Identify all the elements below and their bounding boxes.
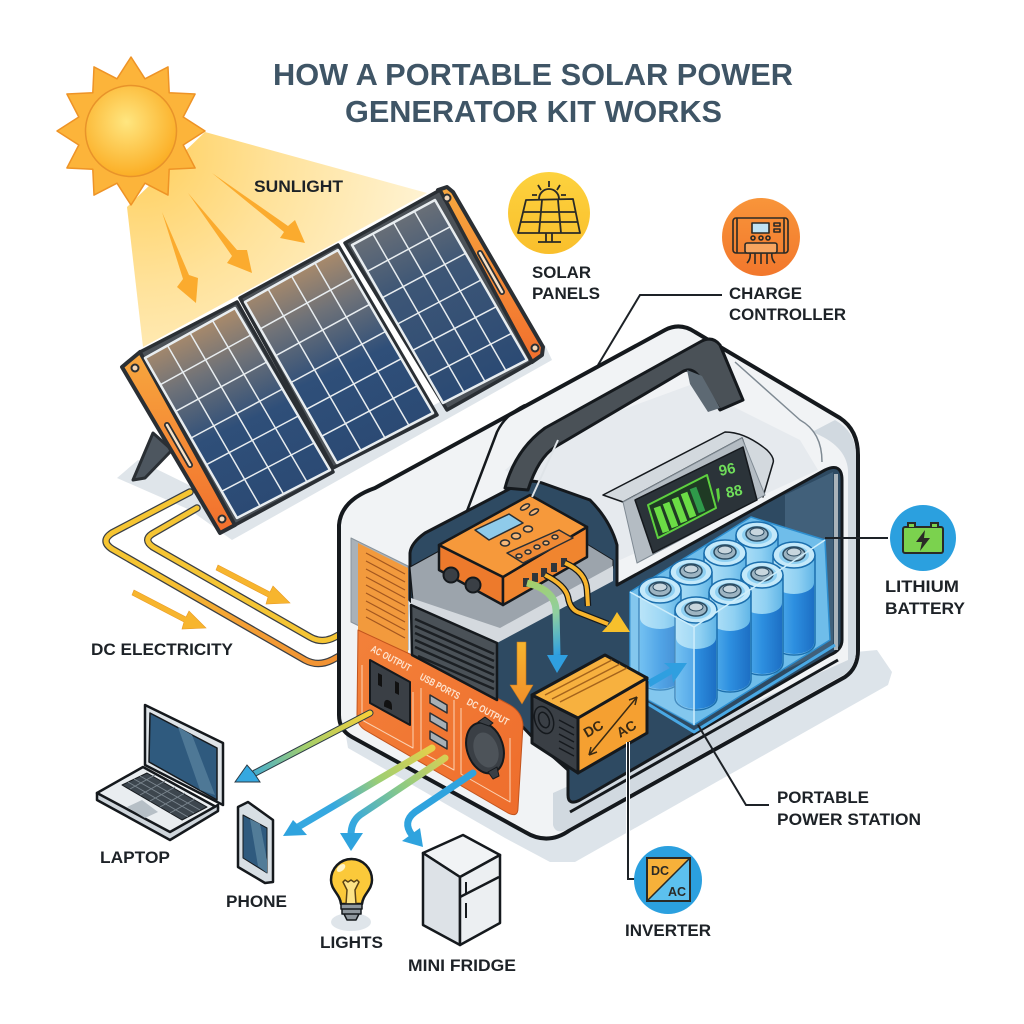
label: sunlight: SUNLIGHT: [254, 177, 344, 196]
panel 3 cells: [352, 200, 527, 403]
label: portable power station: PORTABLE: [777, 788, 869, 807]
output arrow: to fridge: [402, 773, 473, 847]
display digits: [717, 460, 744, 502]
icon: inverter badge: AC: [668, 885, 686, 899]
usb ports: [430, 695, 447, 749]
sunlight beam: [127, 132, 427, 347]
icon: sun: [57, 57, 205, 205]
inverter dc ac text: [580, 717, 639, 741]
compartment cavity: [410, 468, 842, 802]
cable nuts: [444, 568, 458, 582]
left orange strip: [122, 352, 235, 533]
label: portable power station: [777, 788, 921, 829]
flow arrow: inverter to battery: [648, 663, 687, 687]
panel labels: AC OUTPUT: [369, 644, 413, 674]
leader line: inverter: [628, 742, 638, 880]
leader line: charge controller: [598, 295, 722, 365]
panel frames: [140, 190, 532, 525]
top face shade: [505, 385, 818, 560]
output arrow: to laptop: [235, 713, 370, 782]
flow arrow: controller to battery: [545, 563, 630, 632]
title: HOW A PORTABLE SOLAR POWER: [273, 57, 793, 92]
battery pack: [625, 517, 835, 732]
handle inner face: [687, 370, 720, 412]
panel divider lines: [362, 665, 510, 802]
display digits: 88: [724, 482, 744, 502]
icon: solar panels badge: [508, 172, 590, 254]
icon: laptop: [97, 705, 223, 840]
label: lights: LIGHTS: [320, 933, 383, 952]
station ground shadow: [340, 650, 892, 862]
translucent box front: [630, 540, 825, 725]
icon: lithium battery badge: [890, 505, 956, 571]
icon: charge controller badge: [722, 198, 800, 276]
display digits: 96: [717, 460, 737, 480]
inverter dc ac text: AC: [614, 717, 639, 741]
charge controller box: [439, 495, 587, 605]
label: solar panels: PANELS: [532, 284, 600, 303]
label: lithium battery: LITHIUM: [885, 577, 959, 596]
inverter conversion arrow: [589, 697, 637, 755]
panel 1 cells: [145, 308, 330, 518]
panel labels: DC OUTPUT: [465, 697, 510, 728]
icon: light bulb: [331, 859, 372, 931]
wire: yellow dc cable: [148, 508, 448, 640]
solar panels: [122, 187, 543, 533]
battery gauge: [648, 475, 720, 538]
terminal slots: [523, 558, 567, 587]
cavity back wall: [785, 472, 833, 670]
leader line: lithium battery: [825, 537, 888, 539]
output arrow: to lights: [340, 758, 445, 851]
leader line: portable power station: [698, 725, 769, 805]
label: mini fridge: MINI FRIDGE: [408, 956, 516, 975]
body shading: [553, 420, 856, 831]
dc flow arrows: [132, 565, 290, 629]
display bezel: [603, 432, 773, 563]
lcd: [475, 514, 523, 540]
label: charge controller: CHARGE: [729, 284, 802, 303]
controller buttons: [500, 503, 573, 563]
right orange strip: [438, 187, 543, 362]
wire: orange dc cable: [106, 492, 468, 664]
top crease lines: [467, 405, 525, 511]
strip holes and slots: [132, 194, 538, 522]
icon: mini fridge: [423, 835, 500, 945]
dc socket: [460, 717, 510, 779]
label: dc electricity: DC ELECTRICITY: [91, 640, 234, 659]
portable power station: [339, 326, 858, 839]
left orange vent: [351, 538, 408, 655]
body: [339, 326, 858, 839]
label: solar panels: SOLAR: [532, 263, 591, 282]
title: [273, 57, 793, 129]
shelf under controller: [410, 505, 613, 643]
vent block: [411, 605, 497, 700]
ac outlet: [370, 660, 410, 725]
panel 2 cells: [245, 250, 433, 463]
label: charge controller: [729, 284, 846, 324]
label: laptop: LAPTOP: [100, 848, 170, 867]
title: GENERATOR KIT WORKS: [345, 94, 722, 129]
inverter dc ac text: DC: [580, 717, 606, 741]
flow arrow: controller to inverter: [527, 583, 568, 673]
icon: inverter badge: [634, 846, 702, 914]
label: portable power station: POWER STATION: [777, 810, 921, 829]
label: phone: PHONE: [226, 892, 287, 911]
handle: [505, 339, 743, 490]
label: lithium battery: BATTERY: [885, 599, 966, 618]
kickstand: [133, 433, 172, 480]
battery cells: [639, 522, 815, 710]
label: solar panels: [532, 263, 600, 303]
label: inverter: INVERTER: [625, 921, 711, 940]
sunlight arrows: [162, 173, 305, 303]
icon: inverter badge: DC: [651, 864, 669, 878]
icon: phone: [238, 802, 273, 883]
inverter fan: [531, 704, 574, 756]
label: lithium battery: [885, 577, 966, 618]
flow arrow: shelf to inverter: [510, 642, 533, 704]
panel ground shadow: [117, 345, 552, 540]
output arrow: to phone: [283, 748, 432, 836]
panel labels: [369, 644, 510, 728]
inverter: [531, 655, 647, 773]
panel labels: USB PORTS: [418, 672, 462, 702]
front output panel: [357, 630, 523, 815]
cavity lower rim: [570, 660, 838, 812]
cavity metal edge: [834, 474, 838, 650]
label: charge controller: CONTROLLER: [729, 305, 846, 324]
leader line: controller inner: [532, 440, 558, 497]
